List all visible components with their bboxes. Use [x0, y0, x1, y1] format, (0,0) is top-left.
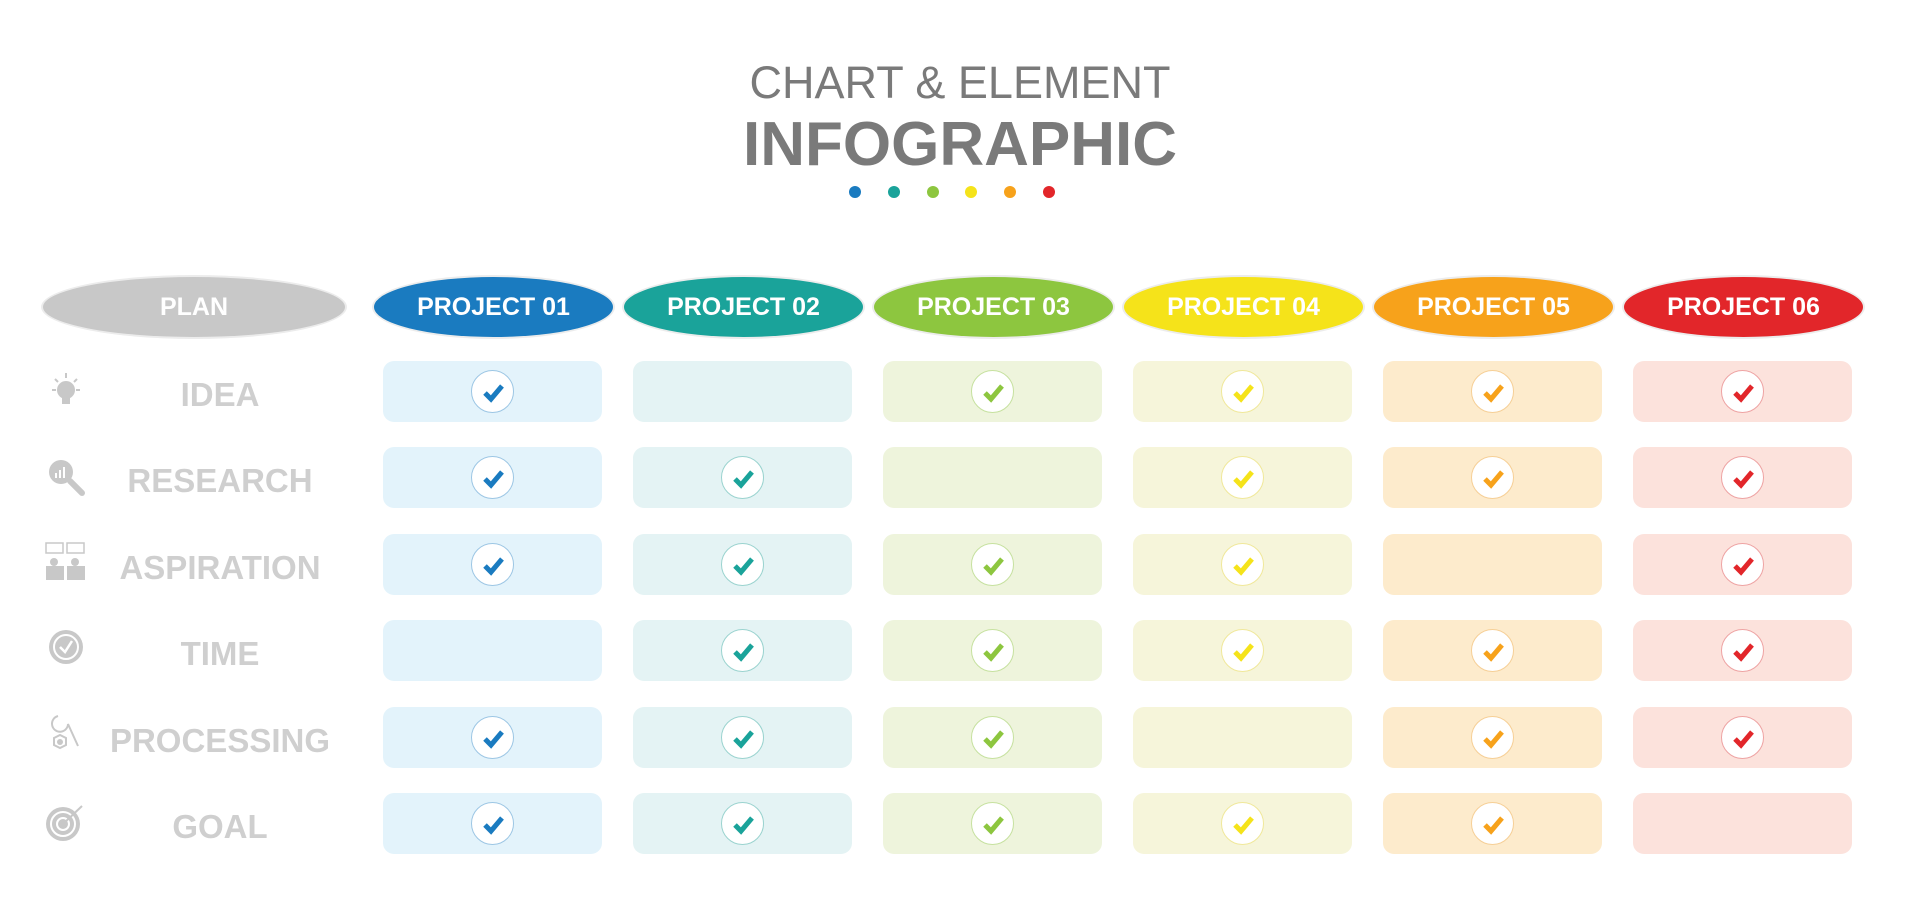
label: processing: PROCESSING	[110, 722, 330, 759]
icon: wrench	[51, 715, 79, 749]
header: project 04	[1124, 277, 1363, 337]
label: research: RESEARCH	[127, 462, 313, 499]
icon: clock	[49, 630, 83, 664]
icon: target	[46, 805, 82, 841]
column: project 01	[383, 361, 602, 854]
icon: people talking	[45, 542, 85, 580]
label: time: TIME	[181, 635, 259, 672]
header: project 01: PROJECT 01	[417, 292, 570, 320]
header: project 01	[374, 277, 613, 337]
row labels	[45, 373, 330, 845]
header: project 04: PROJECT 04	[1167, 292, 1320, 320]
header: project 06	[1624, 277, 1863, 337]
column: project 02	[633, 361, 852, 854]
column: project 05	[1383, 361, 1602, 854]
title: INFOGRAPHIC	[743, 110, 1177, 179]
header: project 06: PROJECT 06	[1667, 292, 1820, 320]
header: project 03: PROJECT 03	[917, 292, 1070, 320]
header: project 03	[874, 277, 1113, 337]
header: project 05	[1374, 277, 1613, 337]
label: goal: GOAL	[172, 808, 268, 845]
header: project 02: PROJECT 02	[667, 292, 820, 320]
label: idea: IDEA	[181, 376, 259, 413]
icon: lightbulb	[52, 373, 80, 404]
icon: magnifier	[49, 460, 85, 496]
color dots	[849, 186, 1055, 198]
title	[743, 57, 1177, 179]
title: CHART & ELEMENT	[750, 57, 1170, 108]
header: project 02	[624, 277, 863, 337]
column: project 06	[1633, 361, 1852, 854]
column: project 03	[883, 361, 1102, 854]
column: project 04	[1133, 361, 1352, 854]
header: plan	[43, 277, 345, 337]
header: project 05: PROJECT 05	[1417, 292, 1570, 320]
header: plan: PLAN	[160, 292, 228, 320]
label: aspiration: ASPIRATION	[119, 549, 321, 586]
